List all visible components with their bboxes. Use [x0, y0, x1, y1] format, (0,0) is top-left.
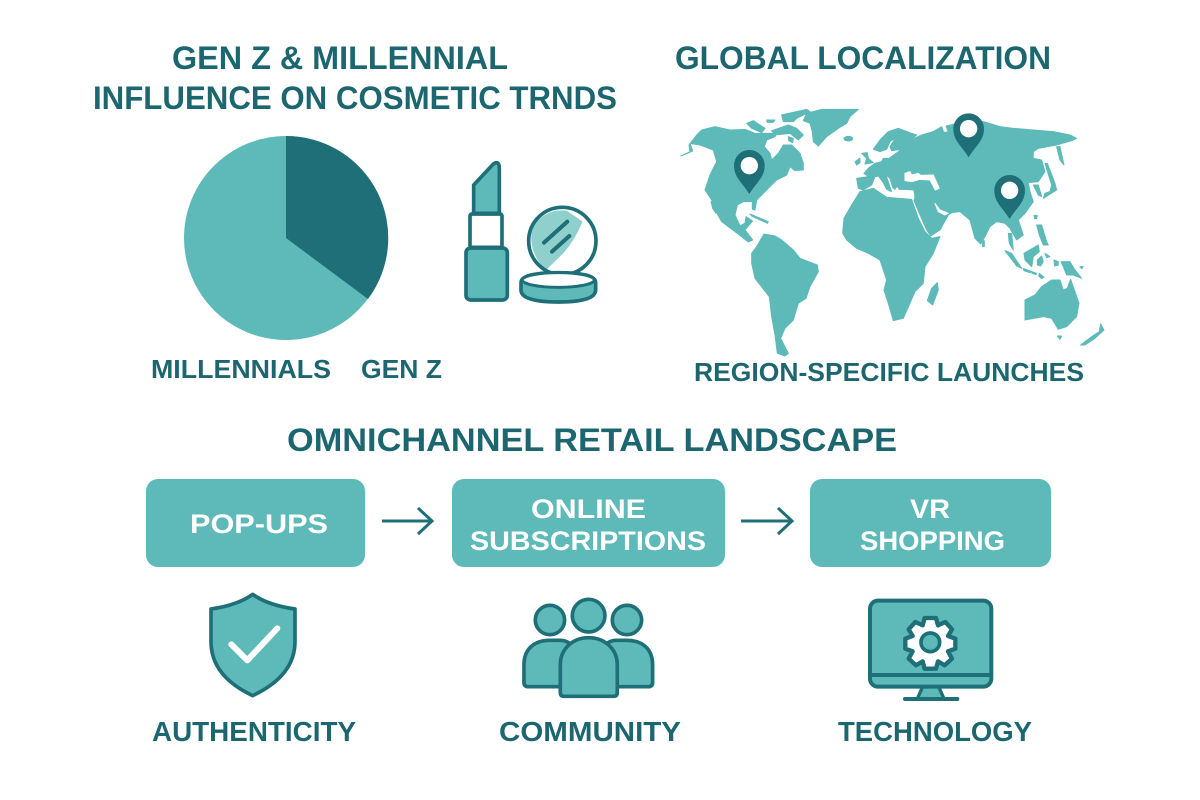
- Madagascar: [927, 283, 938, 305]
- Arctic islands: [747, 109, 810, 143]
- box: Pop-ups: POP-UPS: [190, 509, 328, 539]
- title: Gen Z and Millennial influence: [93, 40, 617, 116]
- Baja California: [711, 202, 716, 213]
- arrow: Online subscriptions to VR shopping: [741, 508, 792, 534]
- box: Online subscriptions: [452, 479, 725, 567]
- label: Gen Z: GEN Z: [361, 354, 442, 384]
- South America: [752, 234, 818, 356]
- Black Sea and Caspian: [905, 172, 939, 190]
- icon: compact mirror: [521, 207, 596, 302]
- Africa: [843, 188, 940, 321]
- Greenland: [803, 109, 858, 146]
- North America: [681, 127, 803, 242]
- title: Gen Z and Millennial influence: GEN Z & MILLENNIAL: [172, 40, 508, 76]
- box: Pop-ups: [146, 479, 365, 567]
- box: VR shopping: VR: [910, 494, 950, 524]
- icon: shield with check: [211, 594, 295, 696]
- label: Region-specific launches: REGION-SPECIFIC LAUNCHES: [694, 357, 1084, 387]
- icon: community of people: [524, 599, 653, 696]
- box: VR shopping: [810, 479, 1051, 567]
- pin: North America: [734, 150, 765, 194]
- Sri Lanka and Taiwan: [983, 215, 1037, 247]
- heading: Omnichannel retail landscape: OMNICHANNEL RETAIL LANDSCAPE: [287, 422, 897, 458]
- label: Technology: TECHNOLOGY: [838, 716, 1032, 747]
- Eurasia: [857, 122, 1077, 244]
- Australia: [1025, 279, 1079, 329]
- label: Community: COMMUNITY: [499, 716, 681, 747]
- label: Millennials: MILLENNIALS: [151, 354, 331, 384]
- world map: [681, 109, 1104, 356]
- arrow: Pop-ups to Online subscriptions: [382, 508, 432, 534]
- label: Authenticity: AUTHENTICITY: [152, 716, 356, 747]
- pie chart: Millennials and Gen Z share: [184, 136, 388, 340]
- icon: monitor with gear: [870, 601, 991, 699]
- Caribbean: [750, 214, 768, 223]
- title: Global localization: GLOBAL LOCALIZATION: [675, 40, 1051, 76]
- Southeast Asia islands: [1005, 225, 1083, 279]
- box: Online subscriptions: ONLINE: [531, 494, 646, 524]
- Persian Gulf: [935, 203, 948, 215]
- title: Gen Z and Millennial influence: INFLUENCE ON COSMETIC TRNDS: [93, 80, 617, 116]
- pin: Russia: [953, 113, 984, 157]
- Iceland: [844, 136, 853, 141]
- Kamchatka, Japan, Korea: [1033, 147, 1064, 198]
- box: VR shopping: SHOPPING: [860, 526, 1005, 556]
- British Isles: [855, 153, 873, 165]
- New Zealand and Tasmania: [1057, 324, 1104, 345]
- box: Online subscriptions: SUBSCRIPTIONS: [470, 526, 706, 556]
- icon: lipstick: [466, 163, 507, 300]
- pin: Southeast Asia: [994, 175, 1025, 219]
